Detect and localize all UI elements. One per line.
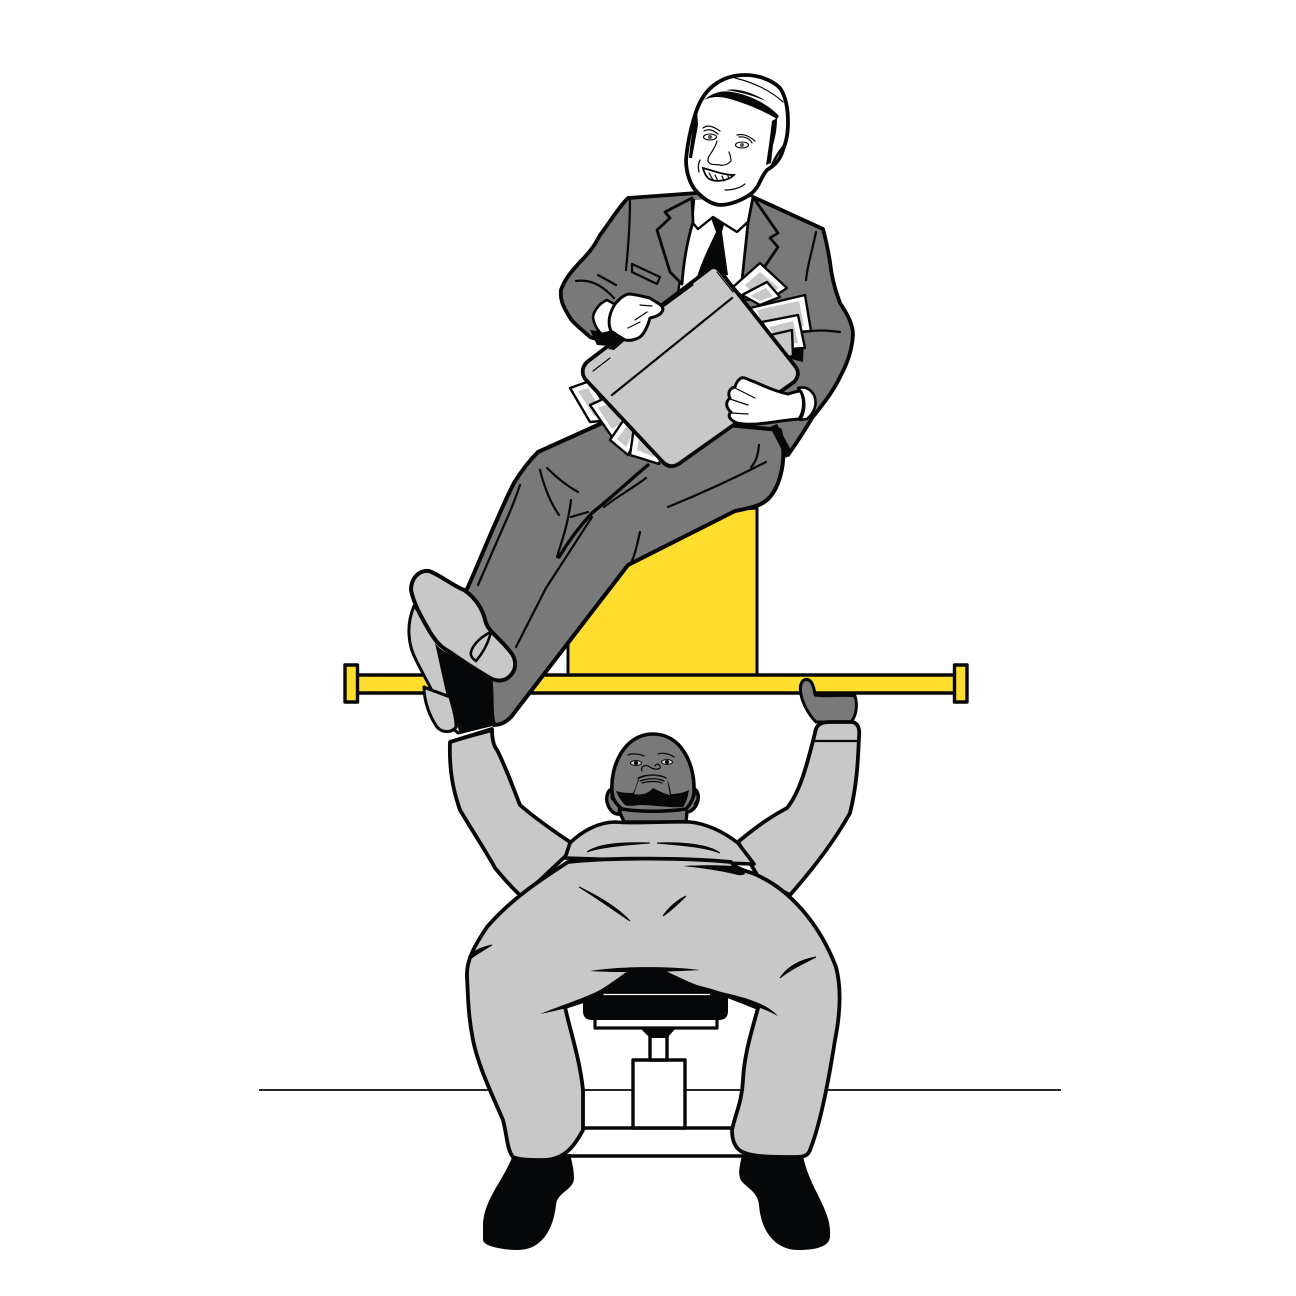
stool [570,970,746,1156]
worker: belly and legs [467,859,840,1160]
floor line [259,1089,1061,1091]
worker: head with beard [607,734,698,822]
businessman: right hand with cuff on briefcase [727,378,816,424]
worker: shoes [483,1154,830,1250]
worker: chest [565,822,754,864]
businessman: shirt and tie [678,197,753,292]
businessman: left hand with cuff on handle [593,294,663,340]
businessman: jacket [561,193,853,455]
businessman: crossed shoe [409,571,515,733]
yellow horizontal bar [345,665,967,702]
worker: right arm and hand [738,679,859,895]
banknotes spilling from top of briefcase [733,263,811,358]
briefcase [583,267,798,466]
banknotes spilling from bottom of briefcase [570,381,665,464]
businessman: jacket lapels [657,197,778,290]
businessman: pants [440,415,792,725]
yellow box pedestal [568,508,757,676]
worker: left arm [450,729,572,897]
businessman: head [686,75,788,205]
